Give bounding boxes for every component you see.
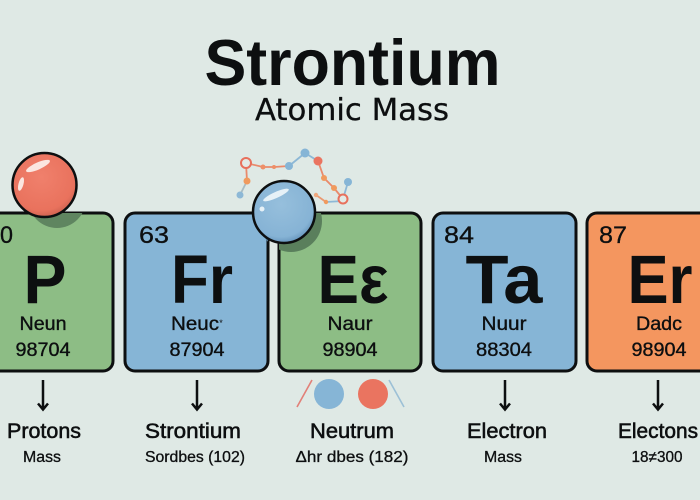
label: Protons: Mass [23,449,61,466]
card: Fr: Neuc [171,314,219,335]
arrow 1 [38,380,48,410]
label: Strontium: Strontium [145,420,241,443]
icon: red sphere [12,153,76,217]
card: Fr: * [219,318,223,328]
label: Electron: Mass [484,449,522,466]
card: P: 98704 [16,340,71,361]
card: P: 0 [0,222,13,249]
card: P: Neun [20,314,66,335]
icon: molecule network [236,148,352,204]
card: Ee: Naur [328,314,373,335]
label: Electron [467,420,547,466]
icon: particles [297,379,404,409]
card: Ee: 98904 [322,340,378,361]
card: Ta: 88304 [476,340,532,361]
label: Neutrum [296,420,408,466]
card: Er [587,213,700,371]
card: Ta [433,213,576,371]
label: Strontium [145,420,245,466]
card: Er: Dadc [636,314,682,335]
card: Fr: Fr [171,241,233,318]
subtitle: Atomic Mass [255,93,449,128]
card: Ee [279,213,421,371]
label: Protons: Protons [7,420,81,443]
card: Er: 87 [599,222,627,249]
card: Er: Er [628,241,692,318]
label: Strontium: Sordbes (102) [145,449,245,466]
title: Strontium [204,26,500,99]
card: P [0,213,113,371]
label: Neutrum: Δhr dbes (182) [296,449,408,466]
shadow: blue sphere [265,213,322,252]
card: Fr: 63 [139,222,169,249]
card: Ta: 84 [444,222,474,249]
label: Neutrum: Neutrum [310,420,394,443]
label: Electron: Electron [467,420,547,443]
card: Fr: 87904 [170,340,225,361]
label: Electons: Electons [618,420,698,443]
card: Ta: Ta [466,241,543,318]
label: Electons [618,420,698,466]
arrow 4 [500,380,510,410]
arrow 5 [653,380,663,410]
label: Protons [7,420,81,466]
card: Ta: Nuur [482,314,527,335]
label: Electons: 18≠300 [632,449,683,466]
card: P: P [24,241,66,318]
shadow: red sphere [34,213,82,228]
arrow 2 [192,380,202,410]
icon: blue sphere [253,181,315,243]
card: Ee: Eε [318,241,388,318]
card: Er: 98904 [632,340,687,361]
card: Fr [125,213,268,371]
